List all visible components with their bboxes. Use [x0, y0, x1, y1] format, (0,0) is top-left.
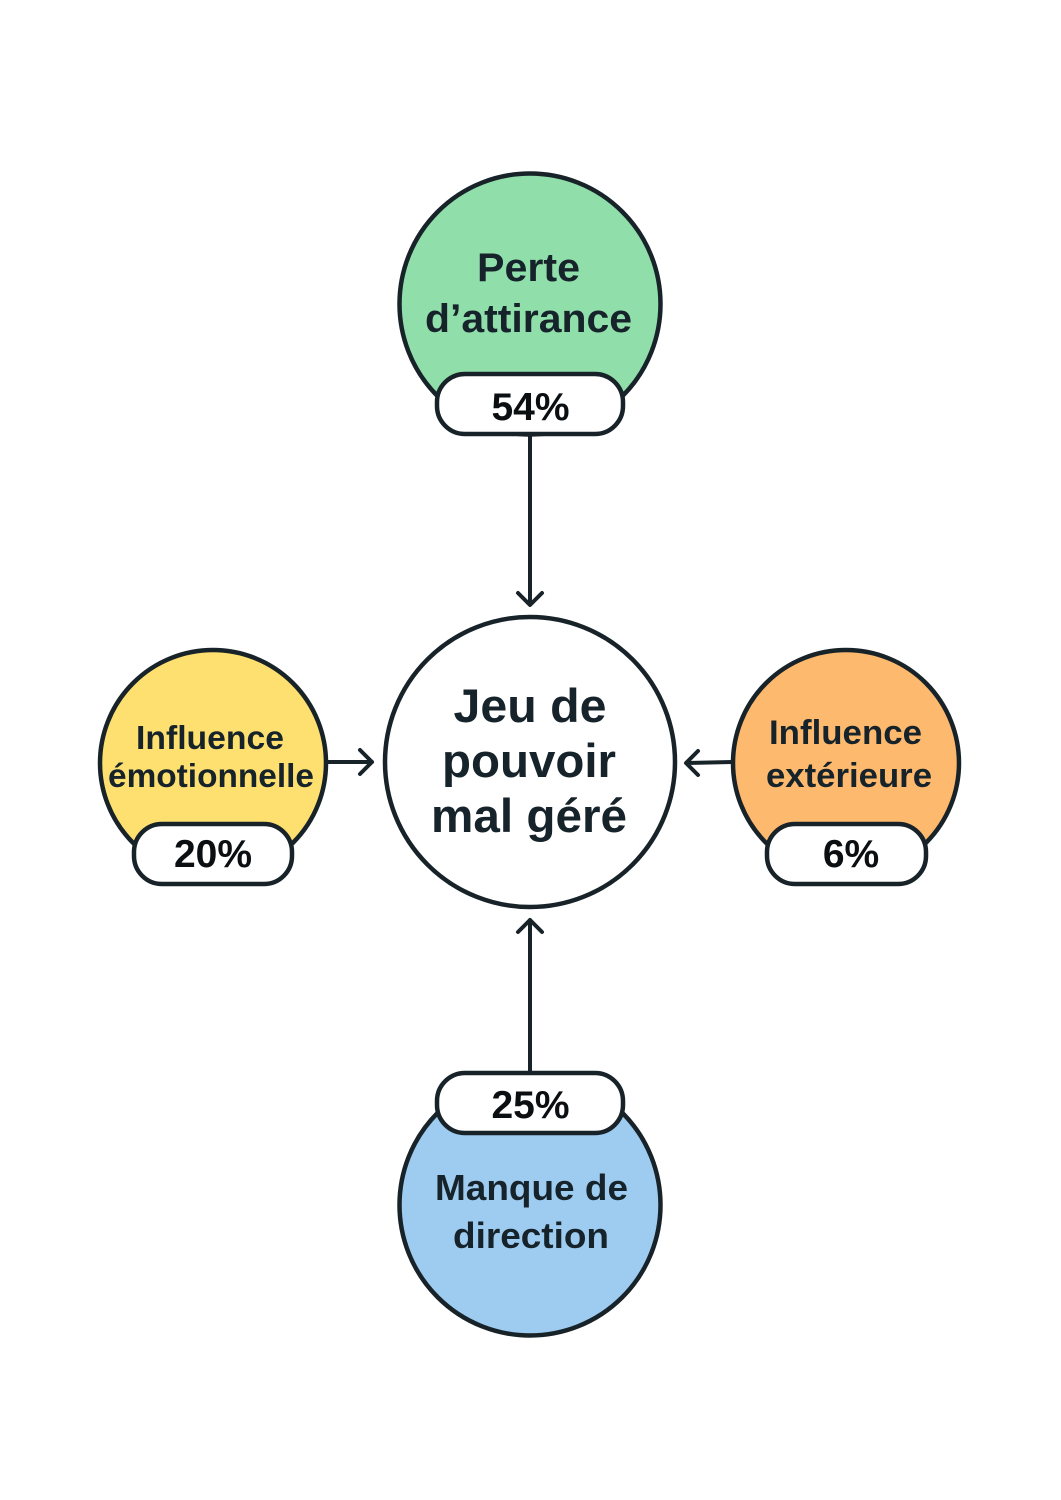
center title	[431, 679, 627, 842]
percentage pill	[767, 824, 926, 884]
label: direction	[453, 1215, 609, 1256]
panel: Perte d'attirance	[400, 174, 660, 434]
panel: Manque de direction	[400, 1073, 660, 1336]
percentage: 54%	[491, 386, 570, 429]
label	[108, 719, 314, 794]
label: Perte	[477, 246, 580, 290]
arrow: top to center	[518, 434, 542, 605]
label: Influence	[769, 714, 922, 752]
circle	[733, 650, 959, 876]
percentage: 20%	[174, 833, 252, 876]
center title: Jeu de	[454, 679, 606, 732]
percentage: 25%	[491, 1084, 570, 1127]
center title: mal géré	[431, 789, 627, 842]
circle	[400, 1074, 660, 1336]
percentage pill	[437, 374, 623, 434]
circle	[100, 650, 326, 876]
center title: pouvoir	[442, 734, 616, 787]
arrow: left to center	[328, 750, 372, 774]
circle	[400, 174, 660, 434]
panel: center circle	[385, 617, 675, 907]
label: d’attirance	[425, 297, 632, 341]
percentage: 6%	[823, 833, 879, 876]
percentage pill	[134, 824, 292, 884]
panel: Influence extérieure	[733, 650, 959, 884]
percentage pill	[437, 1073, 623, 1133]
label: Manque de	[435, 1167, 628, 1208]
label: Influence	[136, 719, 284, 756]
arrow: right to center	[686, 751, 732, 775]
label: émotionnelle	[108, 757, 314, 794]
label: extérieure	[766, 757, 932, 795]
label	[425, 246, 632, 341]
label	[766, 714, 932, 795]
label	[435, 1167, 628, 1256]
arrow: bottom to center	[518, 920, 542, 1072]
panel: Influence émotionnelle	[100, 650, 326, 884]
